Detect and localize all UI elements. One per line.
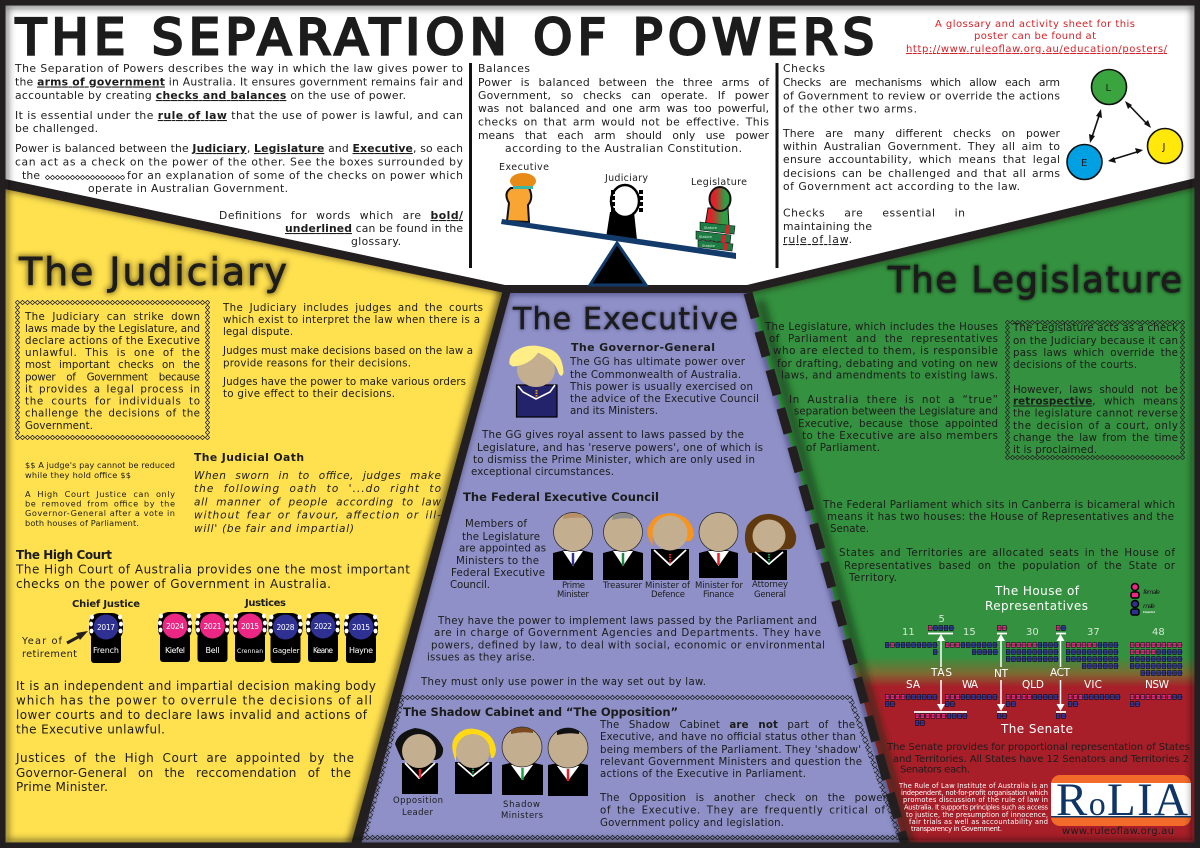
callout: legislature check box: the decision of a court, only: [1013, 420, 1178, 432]
figure: attorney general: Attorney: [752, 580, 788, 590]
year of retirement label: [21, 636, 77, 660]
callout: judiciary check box: power of Government because: [25, 372, 200, 384]
text block: checks: ensure accountability, which means that legal: [783, 153, 1060, 166]
callout: judges pay and removal: [25, 460, 175, 528]
heading: the house of representatives: The House of: [994, 584, 1080, 598]
figures: ministers: [553, 512, 796, 600]
justice: Bell: [196, 612, 230, 662]
text block: members of the legislature: [450, 519, 546, 591]
figure: minister of defence: Minister of: [645, 581, 691, 591]
text block: introduction: operate in Australian Government.: [88, 182, 288, 195]
text block: federal parliament: means it has two houses: the House of Representatives and the: [827, 511, 1174, 523]
heading: the legislature: The Legislature: [887, 260, 1182, 301]
text block: judiciary description: which exist to interpret the law when there is a: [223, 314, 480, 326]
text block: powers of the executive: issues as they arise.: [427, 652, 535, 664]
figure: prime minister: [553, 512, 593, 600]
text block: checks: rule of law.: [783, 233, 852, 246]
seat totals: 11: [902, 627, 915, 638]
text block: checks: [782, 62, 1061, 246]
text block: members of the legislature: Members of: [465, 519, 527, 530]
text block: legislature description: who are elected to them, is responsible: [773, 345, 998, 357]
text block: rule of law institute: promotes discussion of the rule of law in: [903, 796, 1048, 804]
text block: senate: and Territories. All States have 12 Senators and Territories 2: [893, 754, 1189, 765]
icon: executive on scale: Executive: [499, 162, 549, 173]
text block: governor-general: the Commonwealth of Australia.: [570, 369, 741, 381]
text block: checks: within Australian Government. They all aim to: [783, 140, 1060, 153]
text block: judiciary description: [222, 302, 483, 400]
text block: the high court: checks on the power of Government in Australia.: [16, 577, 331, 591]
text block: balances: was not balanced and one arm was too powerful,: [478, 102, 769, 115]
callout: legislature check box: retrospective, which means: [1013, 396, 1178, 408]
justice: French: [89, 613, 123, 663]
text block: the high court: The High Court of Australia provides one the most important: [15, 562, 410, 576]
figure: shadow minister, brown hair: Ministers: [501, 811, 544, 821]
seat totals: 30: [1026, 627, 1039, 638]
text block: legislature description: [764, 321, 998, 454]
text block: federal parliament: Territory.: [848, 572, 897, 584]
text block: legislature description: to the Executive are also members: [802, 430, 998, 442]
text block: members of the legislature: are appointed as: [459, 544, 546, 554]
figure: shadow minister, dark hair: [548, 728, 588, 796]
justice: Hayne: 2015: [352, 623, 370, 632]
text block: high court role: lower courts and to declare laws invalid and actions of: [16, 708, 368, 722]
figure: minister for finance: [695, 512, 744, 600]
text block: judiciary description: The Judiciary includes judges and the courts: [222, 302, 483, 314]
icon: governor-general: [510, 346, 563, 417]
legend item: male: [1131, 600, 1156, 615]
text block: federal parliament: Representatives based on the population of the State or: [844, 560, 1176, 572]
heading: the senate: The Senate: [1000, 722, 1073, 736]
state labels: SA: [906, 679, 921, 691]
text block: shadow cabinet description: Executive, and have no official status other than: [600, 732, 856, 743]
text block: judiciary description: to give effect to their decisions.: [223, 388, 395, 400]
heading: federal executive council: The Federal Executive Council: [463, 490, 659, 504]
panel: white header background: [0, 0, 1200, 286]
seat totals: 5: [938, 614, 945, 625]
title: THE SEPARATION OF POWERS: [15, 9, 874, 66]
icon: legislature on scale: Statute: [704, 226, 717, 230]
text block: judiciary description: Judges must make decisions based on the law a: [222, 345, 473, 357]
text block: powers of the executive: They have the power to implement laws passed by the Parliament and: [437, 616, 817, 627]
callout: legislature check box: the legislature cannot reverse: [1013, 408, 1178, 420]
heading: the legislature: The Legislature: [887, 260, 1182, 301]
figure: treasurer: [602, 512, 643, 591]
seats: head and body division: [885, 628, 1183, 723]
text block: introduction: Power is balanced between the Judiciary, Legislature and Executive, so each: [15, 142, 463, 155]
figure: shadow minister, brown hair: [501, 727, 544, 821]
year of retirement label: Year of: [21, 636, 63, 647]
text block: introduction: be challenged.: [15, 122, 98, 135]
text block: senate: The Senate provides for proportional representation of States: [886, 742, 1190, 753]
heading: the executive: The Executive: [512, 302, 738, 337]
text block: checks: of the other two arms.: [783, 102, 917, 116]
legend item: female: female: [1143, 588, 1160, 596]
text block: balances: means that each arm should only use power: [478, 129, 770, 142]
text block: introduction: Definitions for words which are bold/: [219, 209, 463, 222]
text block: governor-general: The Governor-General: [571, 341, 715, 354]
state labels: WA: [962, 679, 979, 691]
callout: legislature check box: pass laws which override the: [1013, 347, 1178, 359]
text block: governor-general: This power is usually exercised on: [569, 381, 753, 393]
text block: governor-general: [471, 341, 763, 478]
state labels: NT: [994, 668, 1009, 680]
icon: legislature on scale: Legislature: [691, 177, 747, 188]
text block: shadow cabinet description: Government policy and legislation.: [600, 818, 784, 829]
legend item: male: male: [1143, 602, 1155, 610]
figure: opposition leader: Opposition: [393, 796, 443, 806]
callout: judiciary check box: the courts for individuals to: [25, 396, 200, 408]
text block: governor-general: the advice of the Executive Council: [570, 393, 759, 405]
state labels: VIC: [1084, 679, 1102, 691]
text block: introduction: underlined can be found in the: [285, 222, 463, 235]
text block: high court role: Prime Minister.: [16, 780, 108, 794]
chart: high court justices: [21, 598, 378, 663]
heading: shadow cabinet: The Shadow Cabinet and “The Opposition”: [403, 705, 678, 719]
figure: prime minister: Minister: [557, 590, 590, 600]
text block: checks: Checks are essential in: [783, 206, 965, 220]
callout: judiciary check box: The Judiciary can strike down: [24, 311, 200, 323]
text block: legislature description: of Parliament and the representatives: [769, 333, 998, 345]
text block: introduction: The Separation of Powers describes the way in which the law gives power to: [14, 62, 463, 75]
callout: judges pay and removal: be removed from office by the: [25, 498, 175, 508]
text block: powers of the executive: [420, 616, 825, 688]
justice: Kiefel: Kiefel: [165, 646, 185, 655]
callout: judiciary check box: [18, 302, 208, 438]
text block: the judicial oath: When sworn in to office, judges make: [194, 470, 441, 482]
callout: judges pay and removal: while they hold office $$: [25, 470, 131, 480]
text block: governor-general: and its Ministers.: [570, 405, 658, 417]
text block: high court role: the Executive unlawful.: [16, 722, 165, 736]
icon: legislature on scale: Statute: [699, 235, 712, 239]
callout: judiciary check box: declare actions of the Executive: [25, 335, 200, 347]
figure: minister for finance: Minister for: [695, 581, 744, 591]
text block: members of the legislature: Ministers to the: [456, 556, 539, 567]
icon: fulcrum: [590, 243, 646, 285]
callout: judges pay and removal: A High Court Justice can only: [25, 489, 175, 499]
text block: judiciary description: Judges have the power to make various orders: [222, 376, 466, 388]
text block: the judicial oath: [194, 451, 441, 535]
text block: legislature description: of Parliament.: [806, 442, 880, 454]
seats: male members: [885, 628, 1183, 723]
callout: judiciary check box: unlawful. This is one of the: [25, 347, 200, 359]
text block: shadow cabinet description: [599, 720, 888, 829]
text block: judiciary description: legal dispute.: [223, 326, 293, 338]
justice: Hayne: Hayne: [349, 646, 373, 655]
icon: legislature on scale: [691, 177, 747, 251]
justice: Hayne: [344, 613, 378, 663]
text block: federal parliament: Senate.: [830, 523, 869, 535]
chart: high court justices: Chief Justice: [72, 599, 140, 610]
state labels: [906, 667, 1170, 691]
icon: legislature circle: L: [1106, 83, 1112, 94]
figure: opposition leader: Leader: [402, 808, 434, 818]
text block: members of the legislature: the Legislature: [462, 532, 540, 543]
text block: governor-general: to dismiss the Prime Minister, which are only used in: [473, 454, 755, 466]
callout: legislature check box: decisions of the courts.: [1013, 359, 1137, 371]
text block: checks: maintaining the: [783, 220, 872, 233]
callout: legislature check box: change the law from the time: [1013, 432, 1178, 444]
text block: introduction: can act as a check on the power of the other. See the boxes surrounded by: [15, 156, 464, 168]
panel: legislature and senate background: [745, 177, 1200, 848]
callout: legislature check box: However, laws should not be: [1013, 384, 1178, 396]
glossary note: http://www.ruleoflaw.org.au/education/posters/: [906, 44, 1168, 55]
column dividers: [470, 63, 777, 268]
state labels: QLD: [1022, 679, 1044, 691]
text block: the high court: The High Court: [16, 548, 112, 562]
figure: shadow minister, blonde: [452, 729, 496, 794]
text block: members of the legislature: Council.: [450, 580, 490, 591]
seats: female members: [885, 628, 1183, 716]
text block: legislature description: Executive, because those appointed: [798, 418, 998, 430]
heading: the house of representatives: Representatives: [985, 599, 1088, 613]
text block: powers of the executive: are in charge of Government Agencies and Departments. They have: [434, 628, 821, 639]
icon: judiciary on scale: [604, 173, 648, 240]
justice: Gageler: 2028: [276, 623, 295, 632]
chart: balance scale figures: [499, 162, 747, 285]
callout: legislature check box: it is proclaimed.: [1013, 444, 1097, 456]
text block: balances: [478, 62, 770, 155]
callout: legislature check box: on the Judiciary because it can: [1013, 335, 1178, 347]
justice: Crennan: 2015: [241, 622, 259, 631]
text block: shadow cabinet description: actions of the Executive in Parliament.: [600, 769, 806, 780]
text block: rule of law institute: to justice, the presumption of innocence,: [906, 811, 1048, 819]
figure: attorney general: General: [754, 590, 786, 600]
chart: high court justices: Justices: [244, 598, 286, 609]
diagram: L J E checks triangle: [1067, 70, 1182, 180]
text block: shadow cabinet description: of the Executive. They are frequently critical of: [600, 806, 885, 816]
text block: members of the legislature: Federal Executive: [451, 568, 545, 579]
figure: prime minister: Prime: [562, 581, 585, 591]
arrow: year of retirement: [67, 631, 88, 643]
text block: checks: of Government act according to the law.: [783, 180, 1020, 193]
figure: shadow minister, brown hair: Shadow: [503, 800, 540, 810]
callout: judges pay and removal: $$ A judge's pay cannot be reduced: [25, 460, 175, 470]
text block: introduction: the arms of government in Australia. It ensures government remains fair and: [15, 76, 463, 88]
callout: judiciary check box: laws made by the Legislature, and: [25, 323, 200, 335]
text block: checks: decisions can be challenged and that all arms: [783, 167, 1060, 180]
text block: rule of law institute: independent, not-for-profit organisation which: [901, 789, 1048, 797]
text block: introduction: for an explanation of some of the checks on power which: [127, 169, 463, 182]
justice: Keane: 2022: [314, 622, 332, 631]
text block: governor-general: The GG has ultimate power over: [569, 356, 746, 368]
callout: judiciary check box: Government.: [25, 420, 93, 432]
arrows: territories and tasmania: [914, 634, 1066, 712]
text block: the high court: [15, 548, 410, 591]
text block: legislature description: separation between the Legislature and: [794, 406, 998, 418]
panel: executive background: [352, 290, 905, 848]
text block: rule of law institute: [898, 782, 1049, 833]
text block: federal parliament: The Federal Parliament which sits in Canberra is bicameral which: [822, 499, 1175, 511]
text block: rule of law institute: fair trials as well as accountability and: [909, 818, 1048, 826]
text block: the judicial oath: without fear or favour, affection or ill-: [194, 510, 441, 522]
text block: introduction: accountable by creating checks and balances on the use of power.: [15, 89, 406, 102]
glossary note: A glossary and activity sheet for this: [935, 19, 1135, 30]
text block: shadow cabinet description: being members of the Parliament. They 'shadow': [600, 745, 861, 756]
icon: legislature on scale: Statute: [702, 244, 715, 248]
seat totals: 37: [1087, 627, 1100, 638]
callout: judiciary check box: challenge the decisions of the: [25, 408, 200, 420]
callout: legislature check box: [1008, 322, 1182, 458]
icon: seesaw beam: [501, 219, 736, 259]
icon: judiciary circle: J: [1162, 142, 1165, 153]
seat totals: 48: [1152, 627, 1165, 638]
legend: female and male seats: [1131, 584, 1160, 615]
text block: legislature description: laws, and amendments to existing laws.: [781, 370, 998, 382]
icon: executive on scale: [499, 162, 549, 222]
text block: high court role: Governor-General on the reccomendation of the: [16, 766, 351, 780]
justice: Kiefel: 2024: [166, 622, 184, 631]
state labels: NSW: [1145, 679, 1170, 691]
text block: federal parliament: [822, 499, 1176, 584]
text block: checks: of Government to review or override the actions: [783, 90, 1060, 102]
year of retirement label: retirement: [22, 649, 77, 660]
callout: judiciary check box: most important checks on the: [25, 359, 200, 371]
justice: Crennan: [233, 612, 267, 662]
figure: minister for finance: Finance: [703, 590, 734, 600]
text block: the judicial oath: will' (be fair and impartial): [194, 523, 354, 535]
figure: minister of defence: Defence: [651, 590, 685, 600]
text block: the judicial oath: The Judicial Oath: [194, 451, 304, 464]
justice: French: 2017: [97, 623, 115, 632]
text block: judiciary description: provide reasons for their decisions.: [223, 358, 411, 370]
figure: opposition leader: [393, 728, 443, 818]
text block: governor-general: exceptional circumstances.: [471, 466, 614, 478]
heading: the judiciary: The Judiciary: [18, 250, 287, 294]
solid black panel borders: [0, 177, 1200, 848]
text block: senate: [886, 742, 1190, 776]
text block: checks: There are many different checks on power: [782, 127, 1061, 140]
figure: minister of defence: [645, 513, 694, 600]
callout: judiciary check box: it provides a legal process in: [25, 384, 200, 396]
text block: legislature description: for drafting, debating and voting on new: [777, 358, 998, 370]
text block: governor-general: The GG gives royal assent to laws passed by the: [481, 429, 744, 441]
heading: the executive: The Executive: [512, 302, 738, 337]
text block: balances: Balances: [478, 62, 530, 75]
callout: judges pay and removal: both houses of Parliament.: [25, 518, 139, 528]
text block: rule of law institute: The Rule of Law Institute of Australia is an: [898, 782, 1048, 790]
text block: introduction: It is essential under the rule of law that the use of power is lawful, and can: [15, 109, 463, 122]
glossary note: poster can be found at: [974, 31, 1096, 42]
text block: checks: Checks: [783, 62, 825, 75]
text block: rule of law institute: Australia. It supports principles such as access: [904, 804, 1049, 812]
text block: governor-general: Legislature, and has 'reserve powers', one of which is: [477, 442, 763, 454]
state labels: TAS: [930, 667, 952, 679]
text block: balances: Power is balanced between the three arms of: [478, 76, 769, 89]
text block: introduction: the: [22, 169, 40, 182]
figure: attorney general: [745, 514, 796, 600]
arrows between arms: [1089, 101, 1151, 163]
text block: balances: checks on that arm would not be effective. This: [478, 116, 769, 128]
chart: house of representatives and senate seats: [885, 614, 1183, 723]
text block: the judicial oath: all manner of people according to law: [194, 496, 441, 508]
justice: Gageler: Gageler: [272, 647, 300, 655]
justice: Keane: Keane: [313, 646, 333, 655]
text block: shadow cabinet description: The Opposition is another check on the power: [599, 793, 888, 804]
text block: shadow cabinet description: The Shadow Cabinet are not part of the: [599, 720, 855, 731]
text block: rule of law institute: transparency in Government.: [911, 825, 1002, 833]
justice: Bell: 2021: [204, 622, 222, 631]
text block: high court role: It is an independent and impartial decision making body: [16, 679, 376, 693]
seats: all members, outlines: [885, 628, 1183, 723]
state labels: ACT: [1050, 667, 1071, 679]
text block: introduction: glossary.: [351, 235, 401, 248]
text block: checks: Checks are mechanisms which allow each arm: [783, 76, 1060, 89]
glossary note: [906, 19, 1168, 55]
justice: Crennan: Crennan: [237, 648, 263, 655]
heading: the house of representatives: [985, 584, 1088, 613]
panel: judiciary background: [0, 178, 505, 848]
icon: judiciary on scale: Judiciary: [604, 173, 648, 184]
text block: shadow cabinet description: relevant Government Ministers and question the: [600, 757, 862, 768]
justice: Bell: Bell: [206, 646, 220, 655]
callout: legislature check box: The Legislature acts as a check: [1012, 322, 1178, 334]
logo: RoLIA: RoLIA: [1056, 774, 1188, 826]
text block: powers of the executive: They must only use power in the way set out by law.: [420, 677, 706, 688]
justice: French: French: [93, 646, 119, 655]
icon: executive circle: E: [1081, 158, 1087, 169]
text block: high court role: Justices of the High Court are appointed by the: [15, 751, 354, 765]
panel: shadow cabinet and the opposition: [364, 698, 900, 838]
callout: judges pay and removal: Governor-General after a vote in: [25, 508, 175, 518]
text block: senate: Senators each.: [900, 764, 970, 776]
seat totals: [902, 614, 1165, 638]
text block: the judicial oath: the following oath to '...do right to: [194, 483, 441, 495]
seat totals: 15: [963, 627, 976, 638]
figure: treasurer: Treasurer: [602, 581, 642, 591]
legend item: male: Independent: [1143, 610, 1156, 614]
text block: legislature description: The Legislature, which includes the Houses: [764, 321, 998, 333]
text block: high court role: [15, 679, 376, 794]
justice: Gageler: [268, 613, 302, 663]
text block: high court role: which has the power to overrule the decisions of all: [16, 694, 372, 708]
justice: Kiefel: [158, 612, 192, 662]
text block: balances: according to the Australian Constitution.: [505, 142, 742, 155]
text block: powers of the executive: powers, defined by law, to deal with social, economic or environmental: [431, 640, 825, 652]
website address: www.ruleoflaw.org.au: [1062, 826, 1174, 837]
text block: legislature description: In Australia there is not a “true”: [789, 394, 998, 406]
text block: balances: Government, so checks can operate. If power: [478, 89, 770, 102]
heading: the judiciary: The Judiciary: [18, 250, 287, 294]
justice: Keane: [306, 612, 340, 662]
text block: introduction: [14, 62, 464, 248]
text block: federal parliament: States and Territories are allocated seats in the House of: [839, 547, 1175, 559]
